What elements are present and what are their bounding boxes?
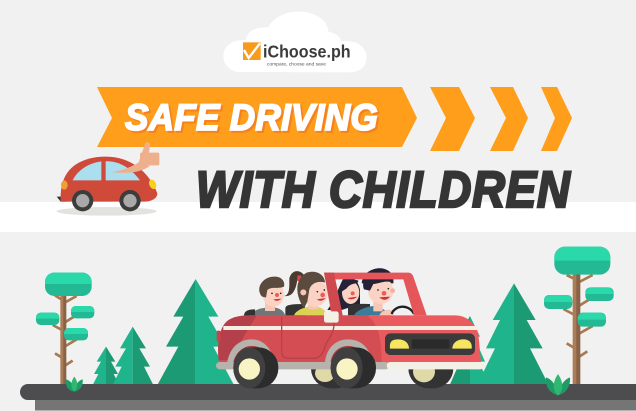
pine trees right	[450, 283, 548, 384]
pine trees left	[93, 279, 234, 385]
medium pine	[113, 327, 153, 385]
heading: safe driving: SAFE DRIVING	[125, 96, 378, 138]
far wheels	[311, 347, 453, 388]
steering wheel	[392, 307, 414, 314]
girl passenger	[284, 271, 328, 315]
thumbs up arm	[111, 142, 159, 173]
wheel arches and bumpers	[216, 339, 484, 369]
orange title banner	[97, 87, 417, 147]
large right pine	[477, 283, 548, 384]
heading: with children: WITH CHILDREN	[196, 162, 571, 219]
right tree	[544, 247, 614, 385]
father driver	[354, 268, 395, 315]
door handle	[324, 311, 339, 323]
small red car with thumbs up	[57, 142, 159, 216]
car body	[217, 315, 481, 363]
logo tagline: compare, choose and save	[267, 62, 326, 67]
large pine	[157, 279, 234, 385]
grille and headlights	[385, 333, 475, 355]
heading shadow: SAFE DRIVING	[127, 98, 380, 140]
logo cloud	[223, 12, 367, 72]
pine behind car	[450, 316, 490, 384]
rear seats	[244, 304, 305, 316]
grass left	[66, 377, 83, 392]
chevron arrows	[430, 87, 572, 151]
family car	[216, 268, 484, 388]
child passenger	[251, 277, 285, 316]
front wheels	[233, 347, 376, 388]
road	[20, 384, 636, 410]
small car wheels	[72, 190, 141, 211]
mother passenger	[327, 277, 370, 315]
logo mark	[243, 42, 261, 60]
grass right	[546, 374, 570, 396]
logo wordmark: iChoose.ph	[263, 41, 351, 61]
small pine	[93, 347, 119, 385]
windshield frame	[324, 273, 427, 315]
left tree	[36, 273, 94, 385]
